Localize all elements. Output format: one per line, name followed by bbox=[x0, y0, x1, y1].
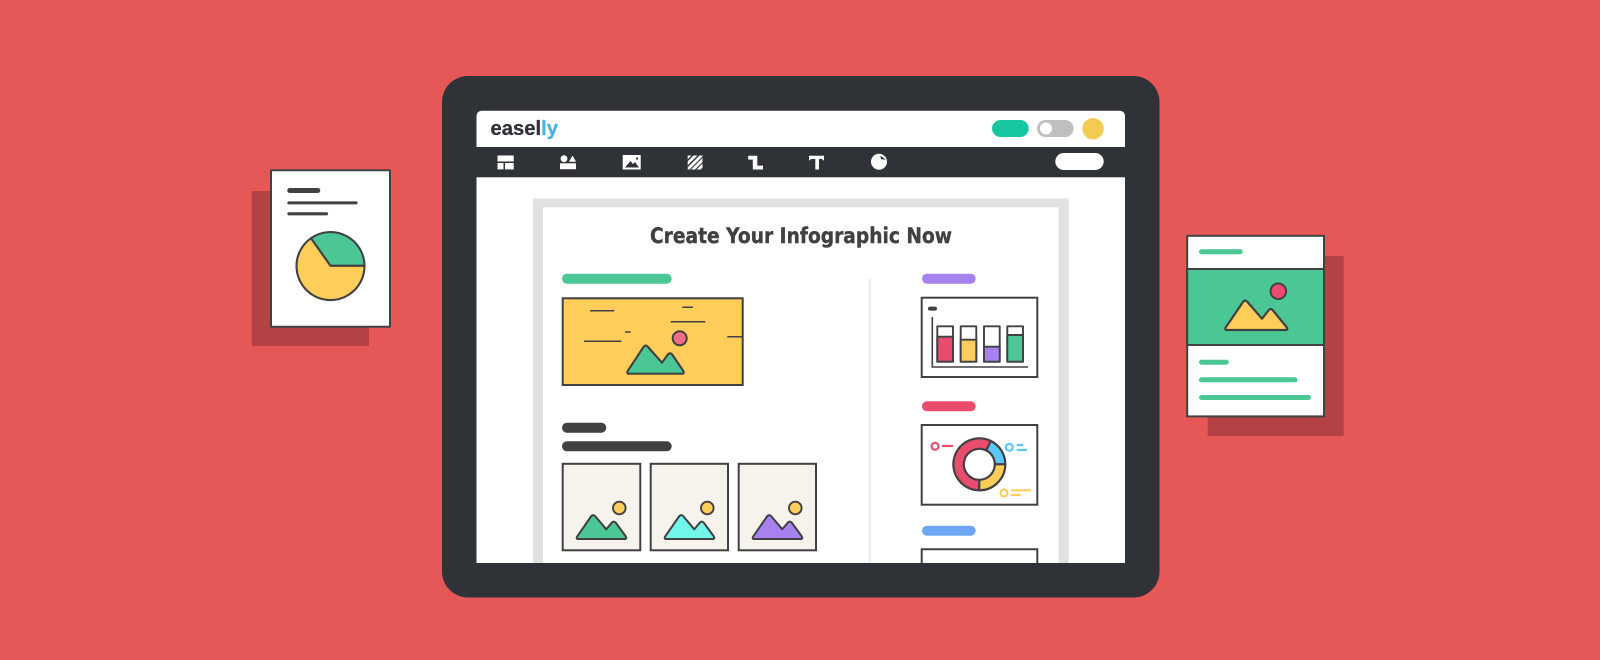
yellow hero image bbox=[563, 298, 743, 385]
icon: pattern bbox=[688, 156, 702, 170]
icon: red sun bbox=[1270, 284, 1286, 299]
panel: toolbar icons bbox=[498, 153, 1104, 170]
left document short text line bbox=[287, 212, 328, 215]
logo: easelly: easelly bbox=[490, 118, 559, 140]
toggle switch bbox=[1037, 120, 1074, 137]
green pill button bbox=[992, 120, 1029, 137]
blue heading bar bbox=[922, 526, 976, 536]
dark heading bar short bbox=[562, 423, 606, 433]
panel: right document with image bbox=[1187, 236, 1344, 436]
bar chart frame bbox=[922, 298, 1037, 377]
bar two bbox=[961, 326, 976, 362]
hero image sky lines bbox=[584, 307, 742, 341]
purple heading bar bbox=[922, 274, 976, 284]
white pill button bbox=[1055, 153, 1104, 170]
hero image sun bbox=[673, 331, 687, 345]
donut legend blue bbox=[1006, 444, 1027, 451]
green heading bar bbox=[562, 274, 672, 284]
image card: green bbox=[563, 464, 640, 550]
bar chart label bbox=[928, 307, 937, 311]
bar chart bbox=[922, 298, 1037, 377]
donut chart frame bbox=[922, 425, 1037, 505]
panel: left document with pie chart bbox=[252, 170, 390, 346]
bar four bbox=[1007, 326, 1023, 362]
image card: cyan bbox=[651, 464, 728, 550]
red heading bar bbox=[922, 401, 976, 411]
panel: app header bar bbox=[476, 111, 1125, 147]
donut chart bbox=[922, 425, 1037, 505]
left document shadow bbox=[252, 191, 369, 346]
illustration canvas bbox=[252, 76, 1344, 598]
icon: layout bbox=[498, 156, 514, 169]
icon: line tool bbox=[748, 156, 763, 170]
right document text line two bbox=[1199, 377, 1298, 382]
icon: image bbox=[623, 155, 641, 170]
right document shadow bbox=[1208, 256, 1344, 436]
bar one bbox=[937, 326, 953, 362]
yellow avatar circle bbox=[1082, 118, 1104, 139]
left document text line bbox=[287, 201, 358, 204]
donut legend yellow bbox=[1000, 490, 1031, 496]
hero image mountains bbox=[627, 346, 684, 374]
right document page bbox=[1187, 236, 1324, 416]
title: Create Your Infographic Now bbox=[650, 224, 952, 248]
document grey frame bbox=[533, 198, 1069, 563]
bar three bbox=[984, 326, 1000, 362]
donut legend red bbox=[932, 443, 953, 450]
panel: tablet frame bbox=[442, 76, 1160, 598]
column divider bbox=[868, 279, 871, 563]
document white sheet bbox=[543, 207, 1059, 563]
icon: yellow mountains bbox=[1225, 300, 1287, 330]
right document text line three bbox=[1199, 395, 1311, 400]
icon: shapes bbox=[560, 155, 576, 169]
left document heading line bbox=[287, 188, 320, 193]
canvas white background bbox=[476, 177, 1125, 563]
bar chart axes bbox=[932, 317, 1028, 367]
donut rings bbox=[953, 438, 1005, 490]
pie yellow slice bbox=[297, 238, 365, 300]
icon: text tool bbox=[809, 156, 824, 170]
pie chart bbox=[297, 232, 365, 300]
right document image band bbox=[1187, 269, 1324, 345]
cropped third chart frame bbox=[922, 549, 1037, 563]
icon: chart bbox=[871, 154, 887, 170]
dark heading bar long bbox=[562, 441, 672, 451]
hero image background bbox=[563, 298, 743, 385]
left document page bbox=[271, 170, 390, 327]
header background bbox=[476, 111, 1125, 147]
right document text line one bbox=[1199, 360, 1229, 365]
panel: canvas area bbox=[476, 177, 1125, 563]
image card: purple bbox=[739, 464, 816, 550]
pie green slice bbox=[311, 232, 364, 266]
right document top line bbox=[1199, 249, 1243, 254]
